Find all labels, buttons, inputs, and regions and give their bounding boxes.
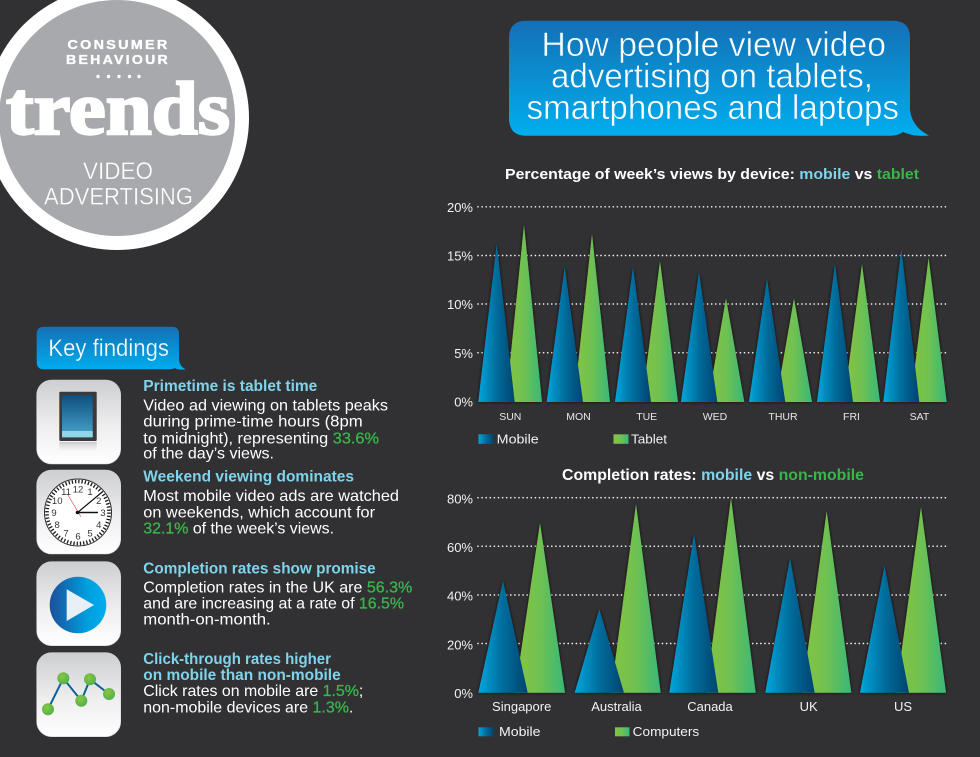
x axis labels: MON (566, 411, 591, 423)
heading: chart 2: Completion rates: mobile vs non-mobile (562, 467, 864, 484)
x axis labels: FRI (843, 411, 860, 423)
heading: chart 1: Percentage of week’s views by device: mobile vs tablet (505, 166, 919, 183)
y axis labels: 5% (454, 346, 473, 361)
icon: clock: 12 (73, 484, 83, 496)
icon: clock: 2 (96, 496, 101, 507)
y axis labels: 60% (447, 540, 473, 555)
bars: FRI (817, 264, 880, 402)
y axis labels (447, 491, 473, 701)
key findings speech bubble (37, 327, 186, 370)
icon: clock: 4 (96, 520, 101, 531)
text: weekend: on weekends, which account for (143, 504, 376, 521)
text: primetime (143, 378, 388, 462)
icon: clock: 5 (87, 528, 93, 540)
text: completion (143, 560, 412, 629)
icon: clock: 9 (51, 508, 57, 519)
y axis labels: 15% (447, 249, 473, 264)
chart: completion rates (447, 491, 946, 739)
y axis labels: 0% (454, 686, 473, 701)
finding 3: completion rates show promise (37, 560, 412, 646)
text: primetime: during prime-time hours (8pm (143, 414, 363, 431)
text: click-through: Click rates on mobile are 1.5%; (143, 683, 363, 700)
gridlines (478, 207, 946, 353)
y axis labels: 0% (454, 395, 473, 410)
bars: THUR (749, 279, 812, 402)
badge topic: video advertising (44, 158, 193, 210)
y axis labels: 40% (447, 588, 473, 604)
icon: clock: 6 (75, 532, 81, 542)
title text: smartphones and laptops (526, 89, 899, 127)
x axis labels: US (894, 699, 912, 714)
gridlines (478, 498, 946, 644)
x axis labels: Singapore (492, 699, 551, 714)
bars: MON (547, 234, 610, 402)
bars: US (860, 507, 946, 693)
bars: Canada (669, 498, 756, 693)
text: click-through (143, 651, 363, 716)
text: completion: Completion rates in the UK are 56.3% (143, 579, 412, 596)
text: weekend: 32.1% of the week’s views. (143, 520, 334, 537)
x axis labels: WED (703, 411, 728, 423)
y axis labels: 20% (447, 200, 473, 215)
legend: Mobile (499, 724, 540, 739)
legend (478, 432, 667, 446)
x axis labels (492, 699, 912, 714)
badge kicker: consumer behaviour (66, 38, 170, 67)
badge topic: video advertising: ADVERTISING (44, 184, 193, 210)
y axis labels: 20% (447, 638, 473, 652)
bars: TUE (615, 261, 678, 402)
text: primetime: to midnight), representing 33.6% (143, 430, 379, 447)
text: completion: Completion rates show promise (143, 560, 376, 577)
badge wordmark: trends: trends (6, 68, 230, 151)
title text (526, 26, 899, 127)
badge: consumer behaviour trends, video advertising (0, 0, 249, 250)
legend: Tablet (631, 432, 667, 446)
text: completion: and are increasing at a rate of 16.5% (143, 596, 404, 613)
text: completion: month-on-month. (143, 612, 271, 629)
y axis labels: 80% (447, 491, 473, 506)
x axis labels: SAT (910, 411, 930, 423)
icon: clock: 3 (100, 508, 106, 519)
legend: Computers (633, 724, 700, 739)
text: primetime: Primetime is tablet time (143, 378, 318, 395)
title text: How people view video (542, 26, 886, 64)
icon: clock: 7 (63, 528, 69, 540)
chart: percentage of week's views by device (447, 200, 947, 446)
x axis labels: Australia (591, 699, 643, 714)
icon: clock (37, 470, 121, 554)
text: primetime: of the day’s views. (143, 446, 274, 462)
bars: SAT (883, 249, 947, 402)
x axis labels: UK (800, 699, 818, 714)
icon: clock: 10 (52, 496, 62, 507)
badge dots (96, 75, 141, 78)
legend: Mobile (497, 432, 539, 446)
key findings label: Key findings (48, 335, 169, 362)
text: primetime: Video ad viewing on tablets peaks (143, 398, 388, 415)
bars: Australia (575, 504, 661, 693)
y axis labels (447, 200, 473, 410)
text: weekend: Most mobile video ads are watched (143, 488, 399, 505)
icon: play button (37, 562, 121, 646)
x axis labels: THUR (768, 411, 798, 423)
icon: line chart (37, 653, 121, 737)
text: click-through: non-mobile devices are 1.3%. (143, 699, 353, 716)
icon: tablet (37, 380, 121, 464)
text: weekend: Weekend viewing dominates (143, 469, 354, 486)
x axis labels: Canada (687, 699, 734, 714)
bars: WED (681, 272, 744, 402)
finding 4: click-through rates (37, 651, 363, 737)
bars: UK (765, 511, 851, 693)
x axis labels: SUN (499, 411, 521, 423)
text: click-through: on mobile than non-mobile (143, 667, 341, 684)
icon: clock: 8 (55, 520, 60, 531)
badge kicker: consumer behaviour: BEHAVIOUR (66, 53, 170, 67)
badge topic: video advertising: VIDEO (83, 158, 153, 185)
badge kicker: consumer behaviour: CONSUMER (68, 38, 170, 52)
bars: Singapore (478, 523, 565, 693)
icon: clock: 11 (61, 487, 71, 498)
text: click-through: Click-through rates higher (143, 651, 331, 668)
x axis labels (499, 411, 930, 423)
y axis labels: 10% (447, 297, 473, 312)
legend (478, 724, 700, 739)
title text: advertising on tablets, (551, 58, 873, 96)
bars: SUN (478, 225, 542, 402)
finding 2: weekend viewing dominates (37, 469, 399, 554)
title speech bubble (509, 21, 929, 136)
x axis labels: TUE (636, 411, 657, 423)
icon: clock: 1 (87, 487, 93, 498)
text: weekend (143, 469, 399, 537)
finding 1: primetime is tablet time (37, 378, 388, 464)
